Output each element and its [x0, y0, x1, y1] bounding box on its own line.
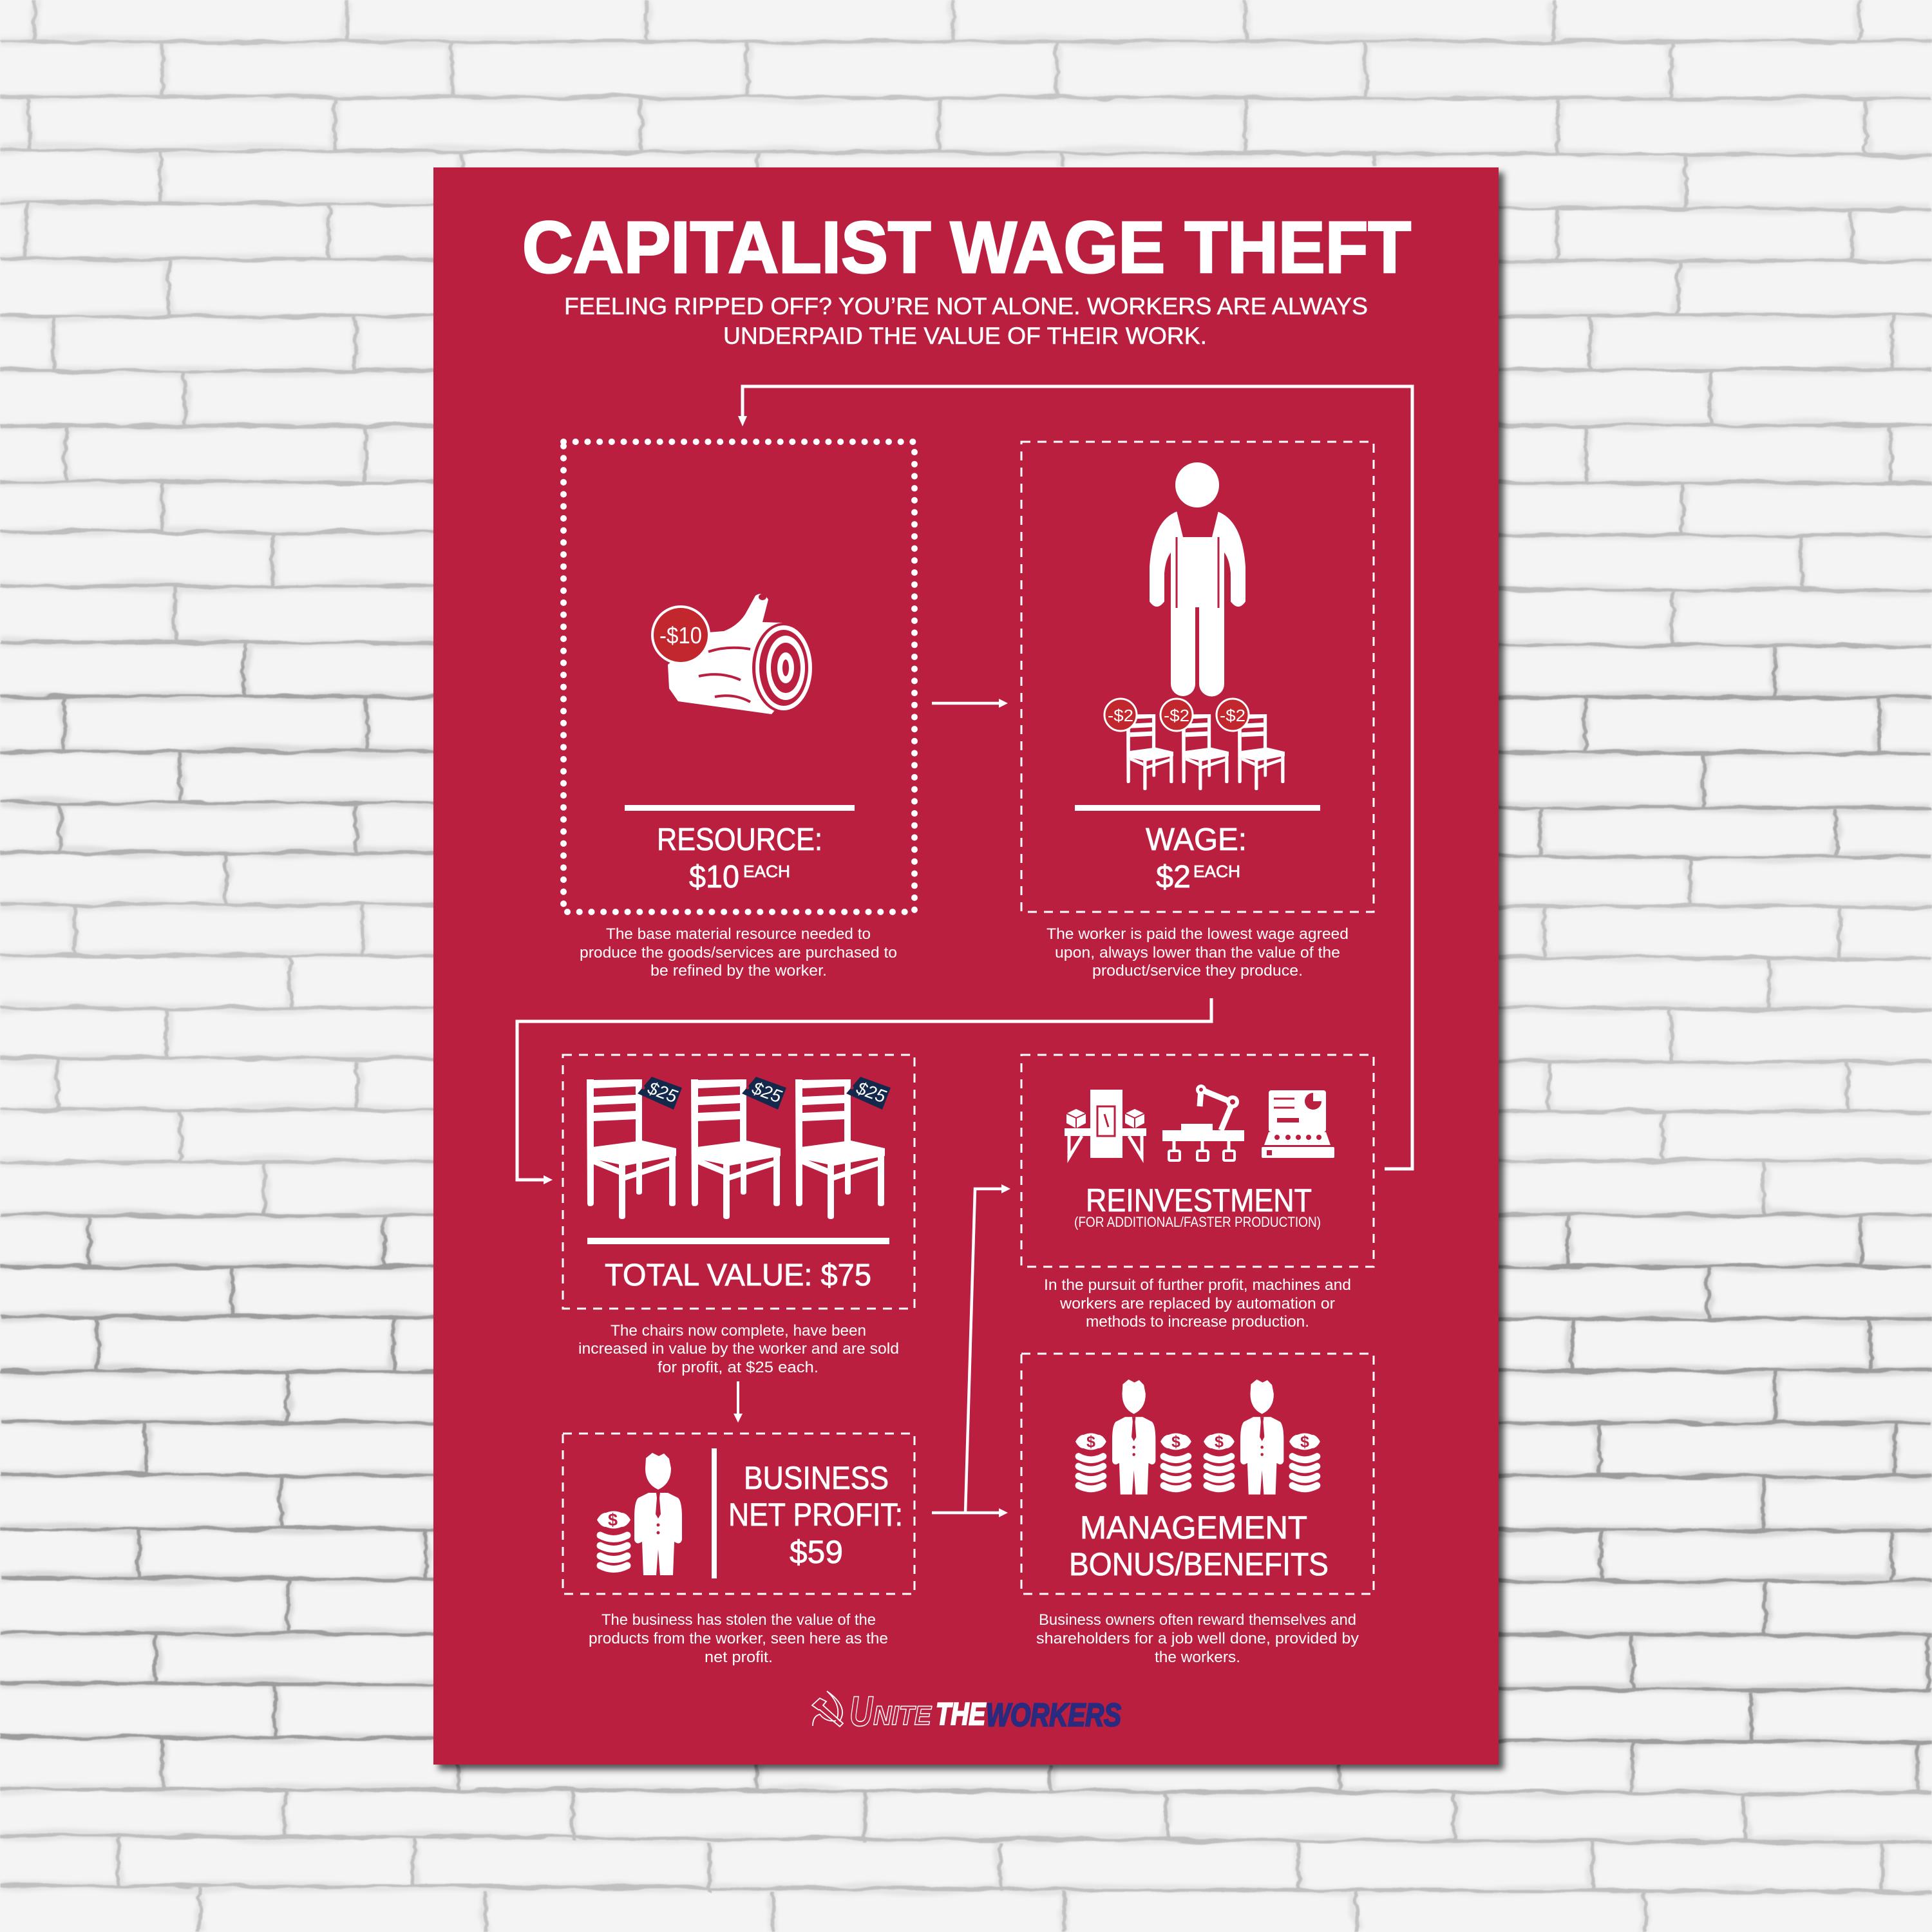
text: profit description: products from the worker, seen here as the: [589, 1630, 888, 1647]
label: management bonus: [1069, 1510, 1329, 1582]
icon: log with price: [652, 594, 815, 714]
text: management description: the workers.: [1155, 1649, 1240, 1666]
text: reinvestment description: workers are replaced by automation or: [1059, 1295, 1335, 1312]
logo: Unite The Workers: U: [849, 1687, 874, 1735]
arrow: wage to total value: [517, 998, 1211, 1184]
label: total value: TOTAL VALUE: $75: [605, 1258, 871, 1293]
panel: management bonus: [1021, 1354, 1374, 1594]
label: resource price: $10: [689, 860, 739, 895]
label: business net profit: [728, 1460, 903, 1570]
label: reinvestment: [1074, 1182, 1321, 1230]
text: wage description: [1046, 925, 1349, 980]
text: management description: shareholders for a job well done, provided by: [1036, 1630, 1359, 1647]
icon: robot arm: [1162, 1084, 1244, 1160]
icon: three priced chairs: $25: [645, 1077, 680, 1107]
panel: wage: [1021, 442, 1374, 912]
arrow: resource to wage: [932, 699, 1008, 708]
logo: Unite The Workers: NITE: [873, 1700, 933, 1730]
label: resource price: EACH: [743, 862, 790, 881]
icon: managers with coins: [1075, 1379, 1320, 1495]
icon: businessman with coins: [597, 1453, 682, 1575]
icon: computer terminal: [1262, 1090, 1334, 1158]
icon: worker in apron: [1150, 462, 1245, 697]
panel: red poster: [433, 167, 1499, 1765]
text: wage description: The worker is paid the lowest wage agreed: [1046, 925, 1349, 943]
icon: hammer and sickle: [812, 1691, 843, 1727]
text: profit description: The business has stolen the value of the: [601, 1611, 876, 1629]
text: total value description: increased in value by the worker and are sold: [578, 1340, 899, 1358]
text: wage description: product/service they produce.: [1092, 962, 1303, 980]
text: profit description: net profit.: [705, 1649, 773, 1666]
icon: three priced chairs: $25: [749, 1077, 784, 1107]
label: wage price: [1146, 822, 1247, 895]
arrow: reinvestment back to resource: [738, 386, 1412, 1169]
icon: chairs with wage badges: [1104, 699, 1285, 790]
text: reinvestment description: In the pursuit of further profit, machines and: [1044, 1276, 1351, 1294]
icon: chairs with wage badges: -$2: [1164, 706, 1189, 725]
panel: business net profit: [563, 1434, 914, 1594]
logo: Unite The Workers: [812, 1687, 1121, 1735]
label: reinvestment: REINVESTMENT: [1086, 1182, 1312, 1218]
title: CAPITALIST WAGE THEFT: [522, 207, 1411, 288]
panel: total value: [563, 1055, 914, 1309]
icon: businessman with coins: $: [608, 1510, 618, 1530]
label: business net profit: BUSINESS: [744, 1460, 889, 1496]
label: wage price: $2: [1156, 860, 1191, 895]
logo: Unite The Workers: WORKERS: [986, 1697, 1121, 1733]
text: management description: Business owners often reward themselves and: [1039, 1611, 1356, 1629]
icon: conveyor machine: [1065, 1090, 1146, 1158]
label: management bonus: BONUS/BENEFITS: [1069, 1546, 1329, 1582]
label: management bonus: MANAGEMENT: [1080, 1510, 1307, 1546]
icon: three priced chairs: [587, 1077, 891, 1219]
logo: Unite The Workers: THE: [936, 1698, 987, 1732]
subtitle: FEELING RIPPED OFF? YOU’RE NOT ALONE. WORKERS ARE ALWAYS: [564, 293, 1368, 319]
text: resource description: The base material resource needed to: [606, 925, 871, 943]
label: business net profit: NET PROFIT:: [728, 1497, 903, 1533]
text: total value description: The chairs now complete, have been: [611, 1322, 866, 1340]
label: resource price: RESOURCE:: [657, 822, 822, 857]
icon: three priced chairs: $25: [853, 1077, 889, 1107]
label: wage price: EACH: [1193, 862, 1240, 881]
text: resource description: be refined by the worker.: [650, 962, 827, 980]
subtitle: [564, 293, 1368, 349]
icon: chairs with wage badges: -$2: [1108, 706, 1133, 725]
arrow: total value to profit: [734, 1381, 743, 1423]
panel: resource: [564, 442, 914, 912]
icon: managers with coins: $: [1086, 1433, 1095, 1451]
icon: managers with coins: $: [1215, 1433, 1224, 1451]
text: total value description: [578, 1322, 899, 1376]
text: reinvestment description: [1044, 1276, 1351, 1331]
panel: reinvestment: [1021, 1055, 1374, 1267]
icon: log with price: -$10: [659, 622, 702, 649]
text: resource description: [580, 925, 897, 980]
subtitle: UNDERPAID THE VALUE OF THEIR WORK.: [723, 323, 1207, 349]
label: reinvestment: (FOR ADDITIONAL/FASTER PRODUCTION): [1074, 1214, 1321, 1230]
text: total value description: for profit, at $25 each.: [658, 1359, 819, 1376]
label: wage price: WAGE:: [1146, 822, 1247, 857]
label: resource price: [657, 822, 822, 895]
arrow: profit to reinvestment and management: [932, 1184, 1010, 1517]
text: reinvestment description: methods to increase production.: [1086, 1313, 1309, 1331]
label: business net profit: $59: [790, 1534, 843, 1570]
icon: chairs with wage badges: -$2: [1220, 706, 1245, 725]
text: wage description: upon, always lower than the value of the: [1055, 944, 1340, 961]
text: management description: [1036, 1611, 1359, 1666]
icon: managers with coins: $: [1171, 1433, 1180, 1451]
icon: managers with coins: $: [1300, 1433, 1309, 1451]
text: profit description: [589, 1611, 888, 1666]
text: resource description: produce the goods/services are purchased to: [580, 944, 897, 961]
